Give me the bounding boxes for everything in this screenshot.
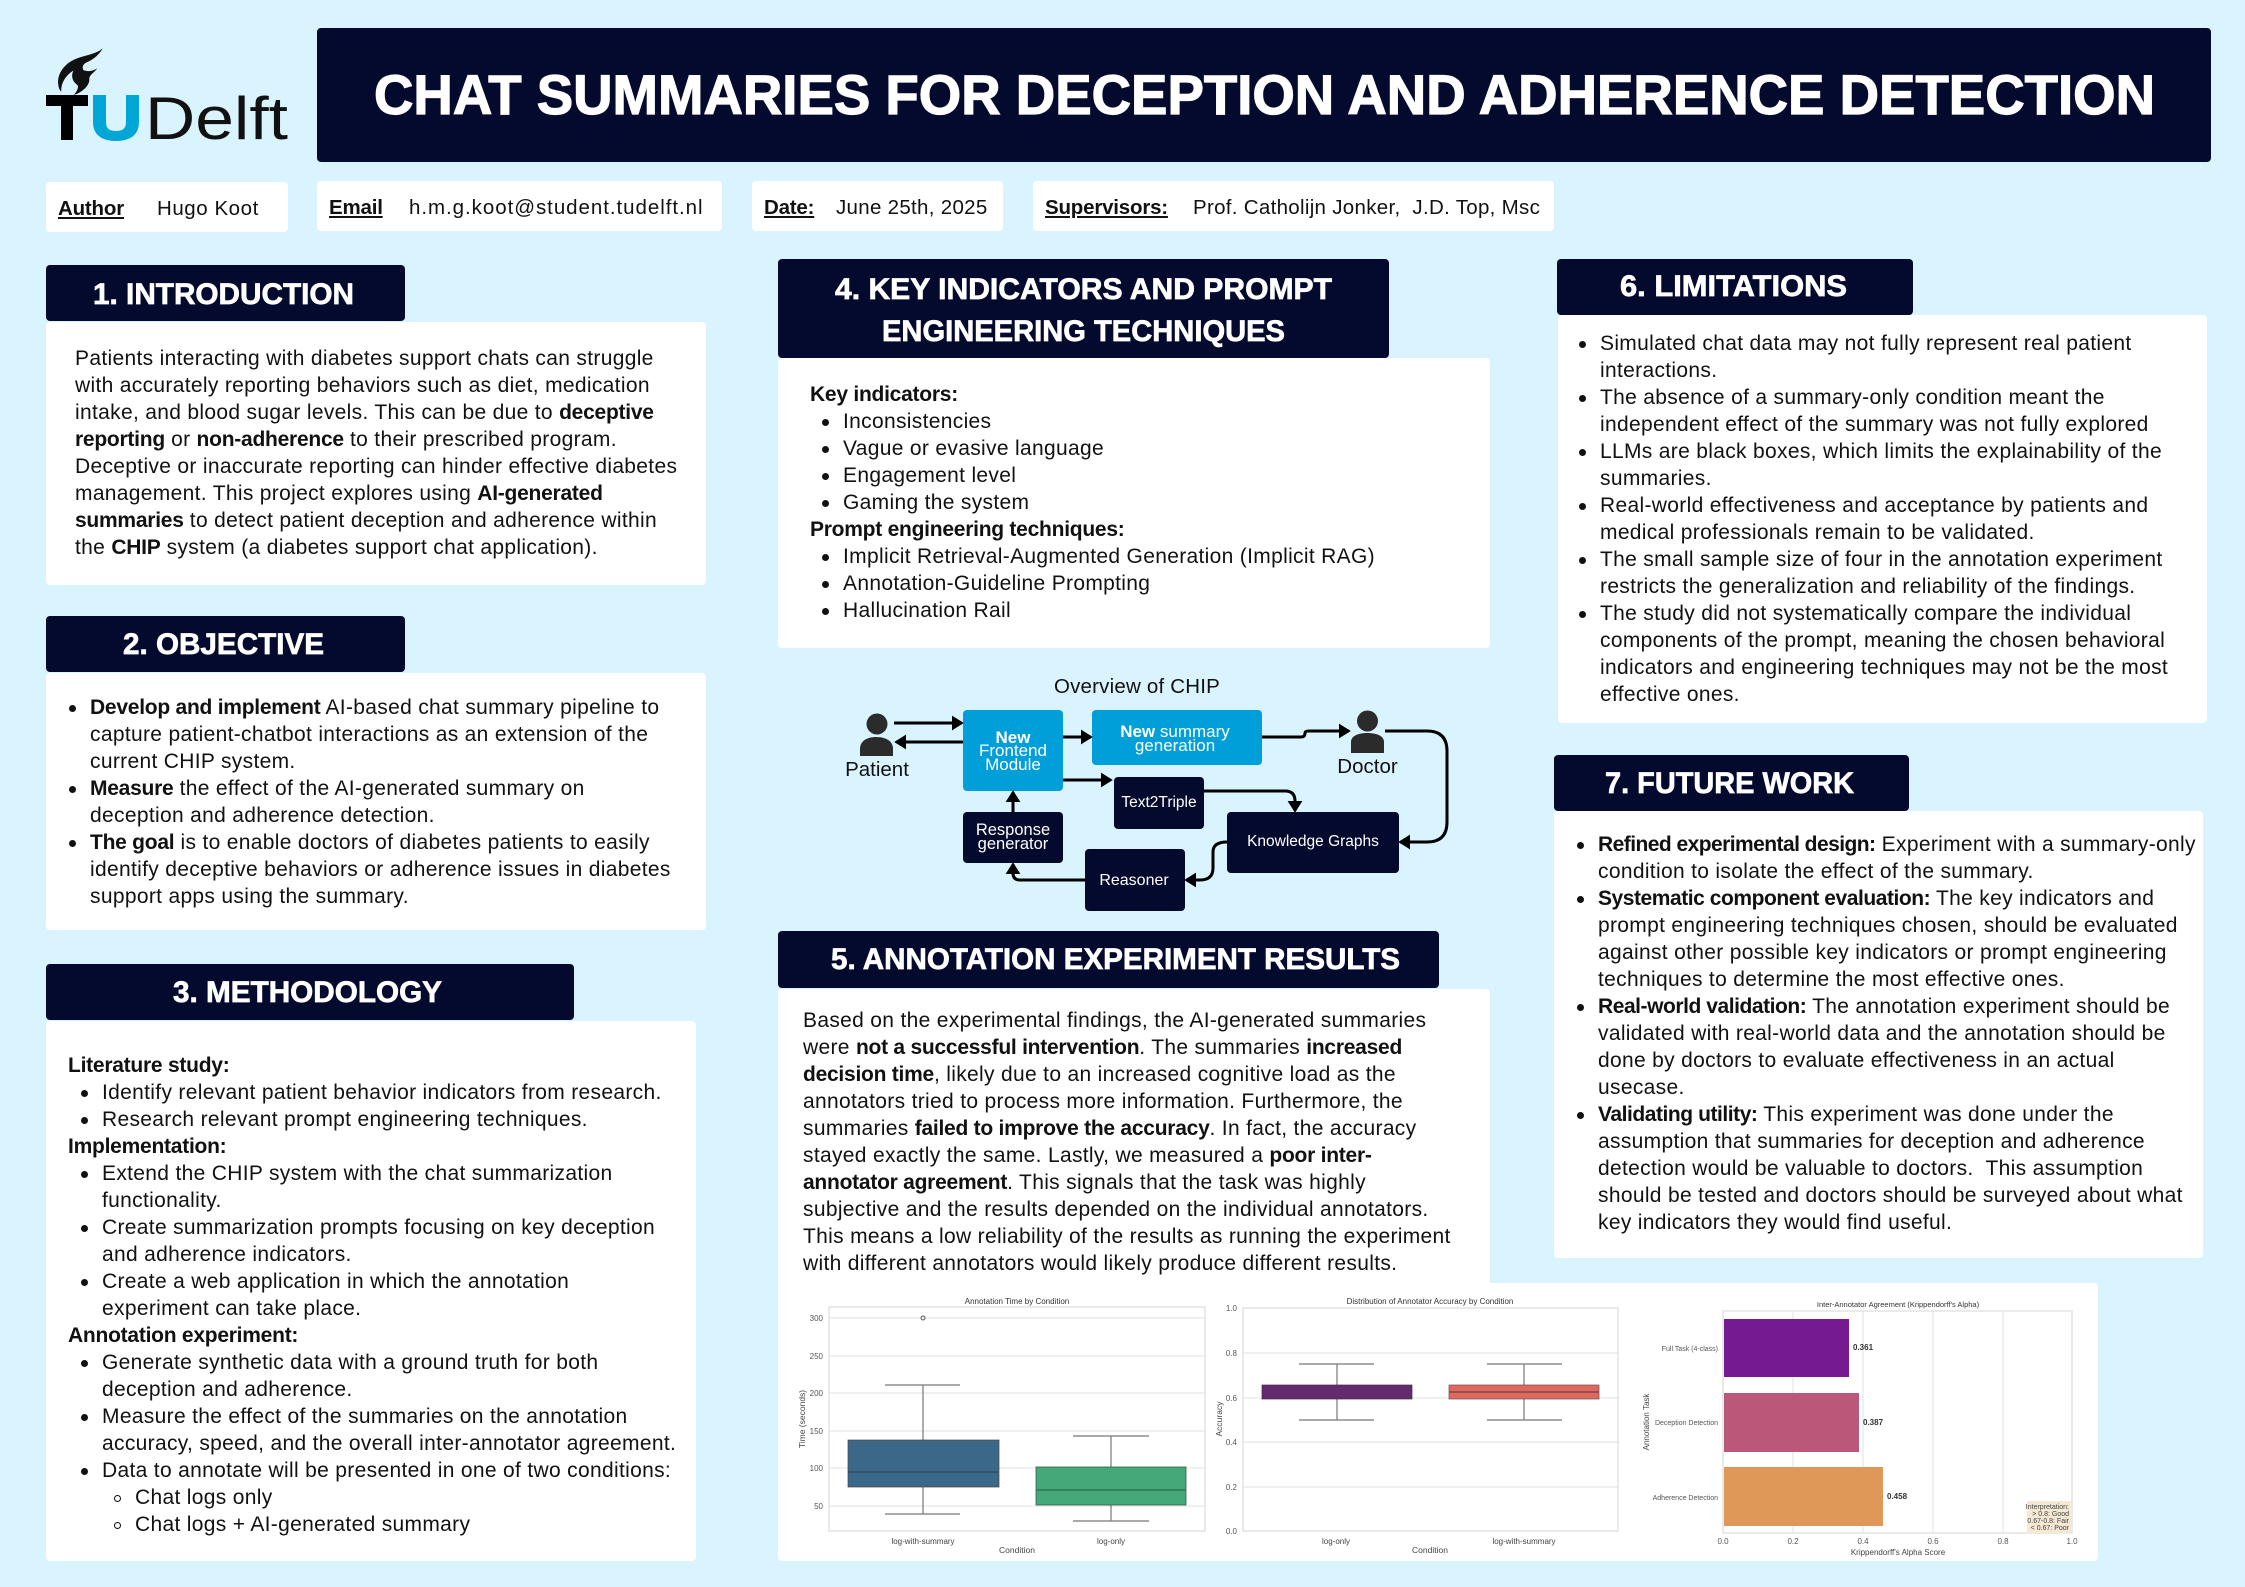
chart: inter-annotator agreement: 0.4 xyxy=(1857,1537,1869,1546)
email box: Email xyxy=(329,196,383,219)
panel: limitations: indicators and engineering techniques may not be the most xyxy=(1600,656,2168,679)
email box: h.m.g.koot@student.tudelft.nl xyxy=(409,196,704,219)
panel: key indicators: Hallucination Rail xyxy=(843,599,1011,622)
panel: limitations: The small sample size of four in the annotation experiment xyxy=(1600,548,2163,571)
panel: methodology: Chat logs only xyxy=(135,1486,273,1509)
date box: June 25th, 2025 xyxy=(836,196,988,219)
panel: methodology: Generate synthetic data with a ground truth for both xyxy=(102,1351,598,1374)
chart: annotation time by condition: 50 xyxy=(814,1502,824,1511)
chart: annotation time by condition: Condition xyxy=(999,1545,1035,1555)
chart: distribution of annotator accuracy by condition: log-only xyxy=(1322,1537,1350,1546)
panel: key indicators: Annotation-Guideline Prompting xyxy=(843,572,1150,595)
chart: distribution of annotator accuracy by condition: 0.0 xyxy=(1226,1527,1238,1536)
panel: methodology: Literature study: xyxy=(68,1054,229,1077)
panel: methodology: Measure the effect of the summaries on the annotation xyxy=(102,1405,628,1428)
panel: result charts xyxy=(778,1283,2098,1561)
diagram: overview of CHIP: Response xyxy=(976,821,1050,839)
chart: annotation time by condition: Time (seconds) xyxy=(797,1390,807,1448)
panel: key indicators: Engagement level xyxy=(843,464,1016,487)
panel: future work: condition to isolate the effect of the summary. xyxy=(1598,860,2034,883)
panel: methodology: Research relevant prompt engineering techniques. xyxy=(102,1108,588,1131)
title banner: CHAT SUMMARIES FOR DECEPTION AND ADHERENCE DETECTION xyxy=(374,63,2155,126)
chart: distribution of annotator accuracy by condition: Condition xyxy=(1412,1545,1448,1555)
panel: introduction: reporting or non-adherence to their prescribed program. xyxy=(75,428,617,451)
heading: 7. Future work: 7. FUTURE WORK xyxy=(1605,767,1854,800)
panel: limitations: interactions. xyxy=(1600,359,1717,382)
panel: objective: The goal is to enable doctors of diabetes patients to easily xyxy=(90,831,650,854)
panel: methodology: Annotation experiment: xyxy=(68,1324,298,1347)
panel: results text: subjective and the results depended on the individual annotators. xyxy=(803,1198,1429,1221)
heading: 2. Objective xyxy=(46,616,405,672)
panel: introduction: Patients interacting with diabetes support chats can struggle xyxy=(75,347,654,370)
panel: results text: summaries failed to improve the accuracy. In fact, the accuracy xyxy=(803,1117,1416,1140)
panel: methodology: Data to annotate will be presented in one of two conditions: xyxy=(102,1459,671,1482)
panel: limitations: summaries. xyxy=(1600,467,1712,490)
panel: limitations: The study did not systematically compare the individual xyxy=(1600,602,2131,625)
panel: objective: current CHIP system. xyxy=(90,750,296,773)
diagram: overview of CHIP: generation xyxy=(1135,736,1215,755)
chart: inter-annotator agreement: Inter-Annotator Agreement (Krippendorff's Alpha) xyxy=(1817,1300,1980,1309)
panel: future work: Refined experimental design: Experiment with a summary-only xyxy=(1598,833,2196,856)
panel: limitations: medical professionals remain to be validated. xyxy=(1600,521,2035,544)
chart: inter-annotator agreement: 0.387 xyxy=(1863,1418,1884,1427)
chart: distribution of annotator accuracy by condition: Distribution of Annotator Accuracy by Condition xyxy=(1347,1297,1513,1306)
panel: future work: against other possible key indicators or prompt engineering xyxy=(1598,941,2167,964)
panel: future work: Systematic component evaluation: The key indicators and xyxy=(1598,887,2154,910)
panel: limitations: LLMs are black boxes, which limits the explainability of the xyxy=(1600,440,2162,463)
panel: limitations: restricts the generalization and reliability of the findings. xyxy=(1600,575,2135,598)
diagram: overview of CHIP: Overview of CHIP xyxy=(1054,675,1220,698)
heading: 5. Annotation experiment results xyxy=(778,931,1439,988)
diagram: overview of CHIP: New xyxy=(996,728,1031,747)
panel: future work: assumption that summaries for deception and adherence xyxy=(1598,1130,2145,1153)
panel: key indicators: Key indicators: xyxy=(810,383,958,406)
chart: inter-annotator agreement: 0.2 xyxy=(1787,1537,1799,1546)
panel: objective: capture patient-chatbot interactions as an extension of the xyxy=(90,723,648,746)
panel: limitations: components of the prompt, meaning the chosen behavioral xyxy=(1600,629,2165,652)
panel: methodology: accuracy, speed, and the overall inter-annotator agreement. xyxy=(102,1432,676,1455)
panel: results text: annotators tried to process more information. Furthermore, the xyxy=(803,1090,1403,1113)
diagram: overview of CHIP: Knowledge Graphs xyxy=(1247,833,1379,850)
chart: distribution of annotator accuracy by condition: 1.0 xyxy=(1226,1304,1238,1313)
title banner xyxy=(317,28,2211,162)
panel: future work: Validating utility: This experiment was done under the xyxy=(1598,1103,2114,1126)
logo: TU Delft: Delft xyxy=(145,85,288,150)
chart: distribution of annotator accuracy by condition: 0.4 xyxy=(1226,1438,1238,1447)
chart: annotation time by condition: 250 xyxy=(810,1352,824,1361)
panel: objective: Measure the effect of the AI-generated summary on xyxy=(90,777,585,800)
chart: inter-annotator agreement: 0.8 xyxy=(1997,1537,2009,1546)
chart: inter-annotator agreement: 0.0 xyxy=(1717,1537,1729,1546)
panel: future work xyxy=(1554,811,2203,1258)
heading: 6. Limitations: 6. LIMITATIONS xyxy=(1620,270,1847,303)
chart: inter-annotator agreement: < 0.67: Poor xyxy=(2031,1525,2070,1532)
panel: key indicators: Implicit Retrieval-Augmented Generation (Implicit RAG) xyxy=(843,545,1375,568)
chart: inter-annotator agreement: 0.361 xyxy=(1853,1343,1874,1352)
heading: 1. Introduction: 1. INTRODUCTION xyxy=(93,278,354,311)
chart: distribution of annotator accuracy by condition: log-with-summary xyxy=(1492,1537,1556,1546)
chart: inter-annotator agreement: 0.458 xyxy=(1887,1492,1908,1501)
chart: inter-annotator agreement: Deception Detection xyxy=(1655,1420,1718,1427)
heading: 3. Methodology xyxy=(46,964,574,1020)
chart: distribution of annotator accuracy by condition: Accuracy xyxy=(1214,1401,1224,1436)
panel: results text: stayed exactly the same. Lastly, we measured a poor inter- xyxy=(803,1144,1372,1167)
panel: methodology: and adherence indicators. xyxy=(102,1243,352,1266)
heading: 5. Annotation experiment results: 5. ANNOTATION EXPERIMENT RESULTS xyxy=(831,943,1400,976)
panel: methodology: Chat logs + AI-generated summary xyxy=(135,1513,470,1536)
panel: methodology xyxy=(46,1021,696,1561)
panel: methodology: functionality. xyxy=(102,1189,222,1212)
chart: annotation time by condition: Annotation Time by Condition xyxy=(965,1297,1069,1306)
diagram: overview of CHIP: Reasoner xyxy=(1099,872,1169,889)
panel: results text: were not a successful intervention. The summaries increased xyxy=(803,1036,1402,1059)
heading: 6. Limitations xyxy=(1557,259,1913,315)
heading: 4. Key indicators and prompt engineering techniques: ENGINEERING TECHNIQUES xyxy=(882,315,1285,348)
panel: limitations: Real-world effectiveness and acceptance by patients and xyxy=(1600,494,2148,517)
panel: methodology: Create summarization prompts focusing on key deception xyxy=(102,1216,655,1239)
chart: distribution of annotator accuracy by condition: 0.2 xyxy=(1226,1483,1238,1492)
panel: introduction: intake, and blood sugar levels. This can be due to deceptive xyxy=(75,401,654,424)
panel: results text: with different annotators would likely produce different results. xyxy=(803,1252,1397,1275)
panel: introduction: with accurately reporting behaviors such as diet, medication xyxy=(75,374,650,397)
supervisors box xyxy=(1033,181,1554,231)
panel: introduction: the CHIP system (a diabetes support chat application). xyxy=(75,536,598,559)
heading: 3. Methodology: 3. METHODOLOGY xyxy=(173,976,442,1009)
author box xyxy=(46,182,288,232)
panel: introduction xyxy=(46,322,706,585)
panel: methodology: deception and adherence. xyxy=(102,1378,353,1401)
panel: limitations: effective ones. xyxy=(1600,683,1740,706)
panel: future work: key indicators they would find useful. xyxy=(1598,1211,1952,1234)
panel: methodology: Create a web application in which the annotation xyxy=(102,1270,569,1293)
chart: inter-annotator agreement: Adherence Detection xyxy=(1653,1495,1718,1502)
panel: introduction: summaries to detect patient deception and adherence within xyxy=(75,509,657,532)
diagram: overview of CHIP: Frontend xyxy=(979,741,1047,760)
panel: introduction: Deceptive or inaccurate reporting can hinder effective diabetes xyxy=(75,455,677,478)
author box: Hugo Koot xyxy=(157,197,259,220)
panel: results text: decision time, likely due to an increased cognitive load as the xyxy=(803,1063,1396,1086)
chart: distribution of annotator accuracy by condition: 0.8 xyxy=(1226,1349,1238,1358)
diagram: overview of CHIP: Doctor xyxy=(1337,755,1398,778)
chart: annotation time by condition xyxy=(797,1297,1205,1555)
chart: annotation time by condition: 300 xyxy=(810,1314,824,1323)
date box xyxy=(752,181,1003,231)
heading: 2. Objective: 2. OBJECTIVE xyxy=(123,628,324,661)
diagram: overview of CHIP xyxy=(845,675,1448,911)
email box xyxy=(317,181,722,231)
panel: future work: detection would be valuable to doctors. This assumption xyxy=(1598,1157,2143,1180)
chart: annotation time by condition: 150 xyxy=(810,1427,824,1436)
panel: future work: should be tested and doctors should be surveyed about what xyxy=(1598,1184,2183,1207)
diagram: overview of CHIP: New summary xyxy=(1120,722,1230,741)
panel: key indicators: Inconsistencies xyxy=(843,410,991,433)
chart: annotation time by condition: 100 xyxy=(810,1464,824,1473)
chart: annotation time by condition: log-only xyxy=(1097,1537,1125,1546)
panel: key indicators: Vague or evasive language xyxy=(843,437,1104,460)
logo: TU Delft xyxy=(46,48,288,150)
panel: methodology: experiment can take place. xyxy=(102,1297,361,1320)
supervisors box: Supervisors: xyxy=(1045,196,1168,219)
panel: key indicators xyxy=(778,358,1490,648)
panel: introduction: management. This project explores using AI-generated xyxy=(75,482,603,505)
chart: inter-annotator agreement: Annotation Task xyxy=(1642,1393,1651,1450)
chart: distribution of annotator accuracy by condition: 0.6 xyxy=(1226,1394,1238,1403)
panel: results text: This means a low reliability of the results as running the experiment xyxy=(803,1225,1451,1248)
panel: future work: prompt engineering techniques chosen, should be evaluated xyxy=(1598,914,2178,937)
supervisors box: Prof. Catholijn Jonker, J.D. Top, Msc xyxy=(1193,196,1540,219)
diagram: overview of CHIP: Patient xyxy=(845,758,909,781)
panel: limitations: The absence of a summary-only condition meant the xyxy=(1600,386,2105,409)
panel: objective: identify deceptive behaviors or adherence issues in diabetes xyxy=(90,858,671,881)
chart: inter-annotator agreement: 0.67-0.8: Fair xyxy=(2027,1518,2070,1525)
panel: key indicators: Gaming the system xyxy=(843,491,1029,514)
panel: methodology: Extend the CHIP system with the chat summarization xyxy=(102,1162,612,1185)
chart: inter-annotator agreement xyxy=(1642,1300,2078,1557)
panel: objective: support apps using the summary. xyxy=(90,885,409,908)
chart: annotation time by condition: 200 xyxy=(810,1389,824,1398)
heading: 4. Key indicators and prompt engineering techniques: 4. KEY INDICATORS AND PROMPT xyxy=(835,273,1332,306)
chart: inter-annotator agreement: Krippendorff's Alpha Score xyxy=(1851,1548,1946,1557)
panel: objective: Develop and implement AI-based chat summary pipeline to xyxy=(90,696,659,719)
date box: Date: xyxy=(764,196,814,219)
panel: limitations: independent effect of the summary was not fully explored xyxy=(1600,413,2149,436)
panel: results text: Based on the experimental findings, the AI-generated summaries xyxy=(803,1009,1426,1032)
panel: future work: usecase. xyxy=(1598,1076,1685,1099)
panel: future work: validated with real-world data and the annotation should be xyxy=(1598,1022,2166,1045)
panel: future work: Real-world validation: The annotation experiment should be xyxy=(1598,995,2170,1018)
panel: limitations: Simulated chat data may not fully represent real patient xyxy=(1600,332,2132,355)
panel: methodology: Identify relevant patient behavior indicators from research. xyxy=(102,1081,662,1104)
panel: results text xyxy=(778,989,1490,1294)
chart: inter-annotator agreement: Interpretation: xyxy=(2026,1504,2069,1511)
diagram: overview of CHIP: generator xyxy=(978,835,1049,853)
panel: key indicators: Prompt engineering techniques: xyxy=(810,518,1125,541)
heading: 7. Future work xyxy=(1554,755,1909,811)
diagram: overview of CHIP: Text2Triple xyxy=(1121,794,1197,811)
chart: inter-annotator agreement: > 0.8: Good xyxy=(2032,1511,2069,1518)
panel: limitations xyxy=(1558,315,2207,723)
panel: future work: done by doctors to evaluate effectiveness in an actual xyxy=(1598,1049,2115,1072)
panel: objective xyxy=(46,673,706,930)
author box: Author xyxy=(58,197,124,220)
panel: future work: techniques to determine the most effective ones. xyxy=(1598,968,2065,991)
panel: objective: deception and adherence detection. xyxy=(90,804,435,827)
chart: distribution of annotator accuracy by condition xyxy=(1214,1297,1618,1555)
panel: results text: annotator agreement. This signals that the task was highly xyxy=(803,1171,1366,1194)
panel: methodology: Implementation: xyxy=(68,1135,226,1158)
heading: 4. Key indicators and prompt engineering techniques xyxy=(778,259,1389,358)
diagram: overview of CHIP: Module xyxy=(985,755,1041,774)
heading: 1. Introduction xyxy=(46,265,405,321)
chart: inter-annotator agreement: 0.6 xyxy=(1927,1537,1939,1546)
chart: annotation time by condition: log-with-summary xyxy=(891,1537,955,1546)
chart: inter-annotator agreement: 1.0 xyxy=(2066,1537,2078,1546)
chart: inter-annotator agreement: Full Task (4-class) xyxy=(1662,1346,1718,1353)
